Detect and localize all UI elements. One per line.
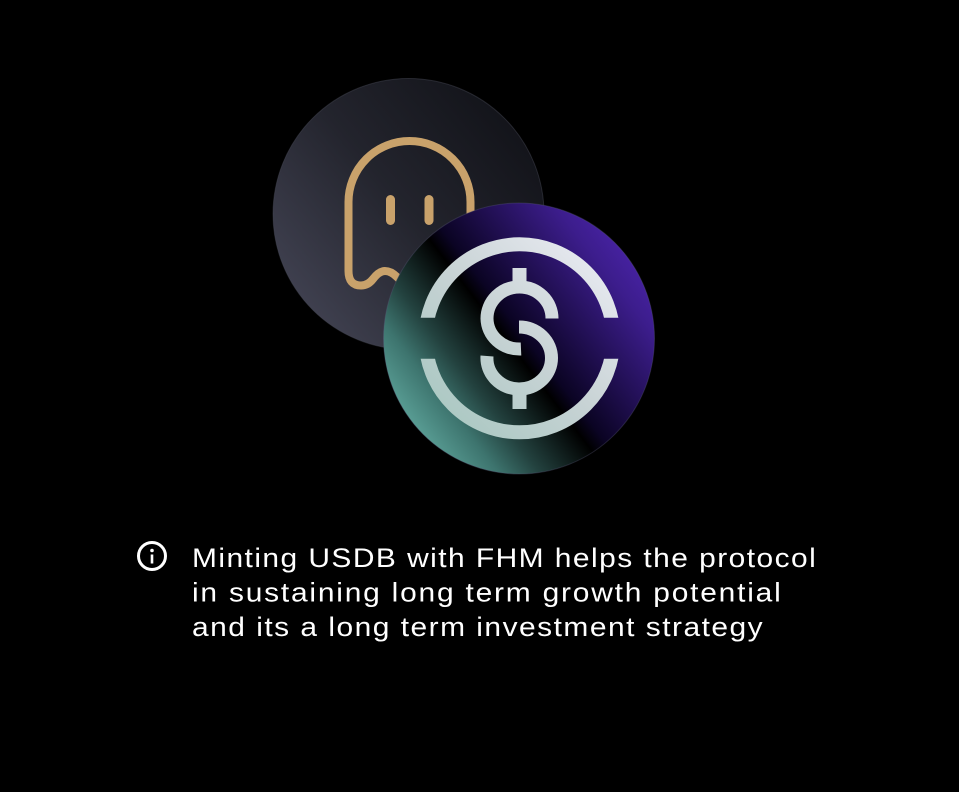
text block: description [192,543,816,642]
icon: info [138,542,166,570]
icon: ghost right eye [424,195,434,225]
icon: USDB coin [384,203,654,474]
icon: ghost left eye [386,195,395,225]
ghost coin disc [273,78,544,350]
icon: dollar sign [487,268,552,409]
text block: description: in sustaining long term growth potential [192,577,781,607]
text block: description: and its a long term investment strategy [192,612,764,642]
USDB coin disc [384,203,654,474]
icon: ghost outline [348,141,470,289]
icon: split ring [426,244,614,432]
text block: description: Minting USDB with FHM helps the protocol [192,543,816,573]
icon: ghost coin [273,78,544,350]
